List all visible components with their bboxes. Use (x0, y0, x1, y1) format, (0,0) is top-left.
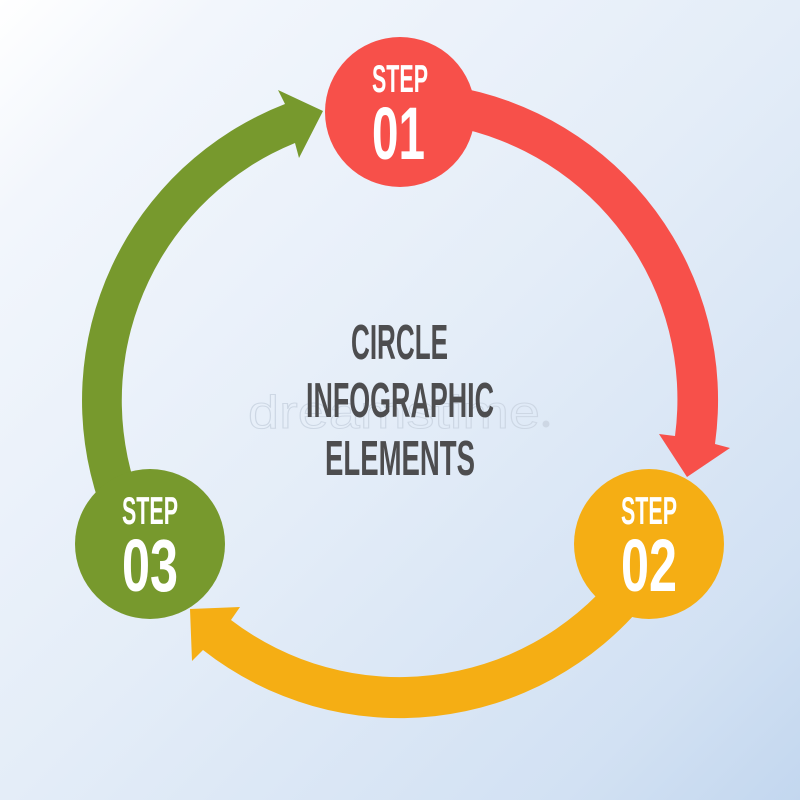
step 03 number: 03 (122, 524, 178, 607)
step 01 label: STEP (372, 58, 428, 101)
step 03 label: STEP (122, 490, 178, 533)
arrow: step 01 to step 02 (450, 86, 730, 477)
step 02 badge (574, 469, 724, 619)
title: CIRCLE (351, 316, 448, 370)
title: ELEMENTS (325, 432, 475, 486)
step 02 label: STEP (621, 490, 677, 533)
step 02 number: 02 (621, 524, 677, 607)
title (306, 316, 494, 486)
step 01 number: 01 (372, 92, 425, 175)
watermark: dreamstime (248, 386, 540, 438)
arrow: step 02 to step 03 (190, 575, 647, 718)
arrow: step 03 to step 01 (82, 90, 323, 503)
step 03 badge (75, 469, 225, 619)
title: INFOGRAPHIC (306, 374, 494, 428)
step 01 badge (325, 37, 475, 187)
